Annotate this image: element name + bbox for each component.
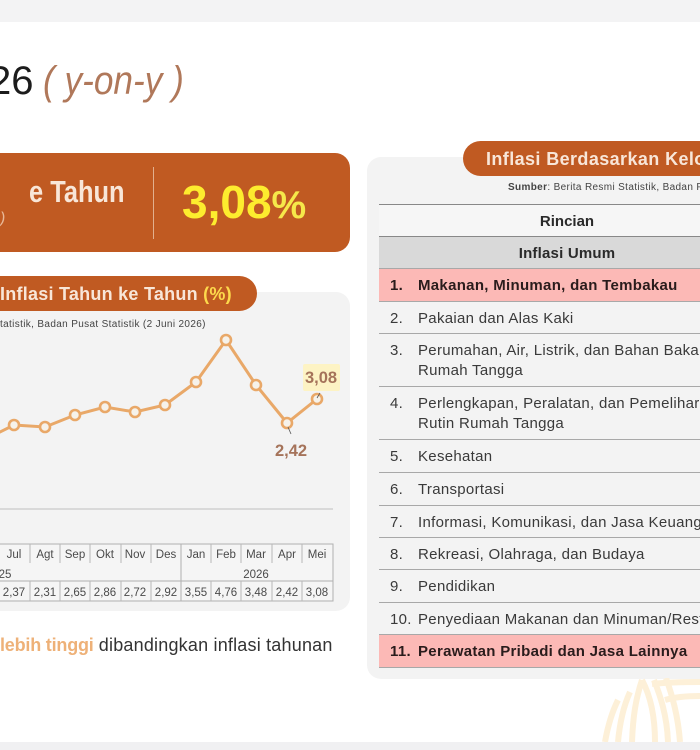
row 1 (379, 269, 700, 302)
data table: 3,08 (306, 587, 328, 599)
line chart: 3,08 (305, 369, 337, 387)
row 11: 11. (390, 643, 411, 660)
data table: Agt (36, 549, 54, 561)
row 7: 7. (390, 514, 403, 531)
row 7 (379, 506, 700, 538)
row 5: 5. (390, 448, 403, 465)
row 5: Kesehatan (418, 448, 492, 465)
row 6: 6. (390, 481, 403, 498)
row 8: 8. (390, 546, 403, 563)
row 2: 2. (390, 310, 403, 327)
headline value: 3,08% (182, 176, 306, 228)
row 10 (379, 603, 700, 635)
headline label: e Tahun (29, 174, 125, 209)
data table: 3,48 (245, 587, 267, 599)
row 9: 9. (390, 578, 403, 595)
row 11 (379, 635, 700, 668)
title qualifier: ( y-on-y ) (43, 59, 184, 103)
data table: Jan (187, 549, 205, 561)
line chart (0, 334, 340, 510)
chart heading pill: Inflasi Tahun ke Tahun (%) (0, 284, 232, 304)
row 4: 4. (390, 395, 403, 412)
column header: Rincian (540, 213, 594, 230)
row 2: Pakaian dan Alas Kaki (418, 310, 574, 327)
decorative logo arcs (602, 678, 700, 742)
bottom band (0, 742, 700, 750)
row 4: Rutin Rumah Tangga (418, 415, 564, 432)
general inflation row (379, 237, 700, 269)
panel: inflation by group (367, 157, 700, 679)
data table: Mei (308, 549, 326, 561)
data table: 2,31 (34, 587, 56, 599)
data table: 4,76 (215, 587, 237, 599)
row 3: Rumah Tangga (418, 362, 523, 379)
headline label remainder: ) (0, 210, 5, 227)
row 3: Perumahan, Air, Listrik, dan Bahan Bakar (418, 342, 700, 359)
data table: 2,65 (64, 587, 86, 599)
panel: headline inflation value (0, 153, 350, 252)
data table (0, 544, 334, 602)
data table: 2,92 (155, 587, 177, 599)
column header (379, 204, 700, 237)
chart heading pill (0, 276, 257, 311)
data table: Des (156, 549, 176, 561)
chart source: tatistik, Badan Pusat Statistik (2 Juni 2026) (0, 319, 206, 330)
data table: Mar (246, 549, 266, 561)
data table: Nov (125, 549, 145, 561)
data table: 2,72 (124, 587, 146, 599)
group heading pill (463, 141, 700, 176)
data table: Apr (278, 549, 296, 561)
data table: Sep (65, 549, 85, 561)
row 3 (379, 334, 700, 387)
row 6 (379, 473, 700, 506)
row 11: Perawatan Pribadi dan Jasa Lainnya (418, 643, 687, 660)
vertical divider (153, 167, 154, 239)
row 6: Transportasi (418, 481, 504, 498)
top band (0, 0, 700, 22)
row 10: 10. (390, 611, 412, 628)
table: inflation groups (379, 204, 700, 668)
row 3: 3. (390, 342, 403, 359)
data table: 3,55 (185, 587, 207, 599)
row 1: 1. (390, 277, 403, 294)
data table: 2,42 (276, 587, 298, 599)
general inflation row: Inflasi Umum (519, 245, 615, 262)
data table: Okt (96, 549, 115, 561)
row 8 (379, 538, 700, 570)
panel: annual inflation chart (0, 292, 350, 611)
data table: 2,86 (94, 587, 116, 599)
data table: 2,37 (3, 587, 25, 599)
row 9: Pendidikan (418, 578, 495, 595)
row 1: Makanan, Minuman, dan Tembakau (418, 277, 678, 294)
line chart: 2,42 (275, 442, 307, 460)
row 9 (379, 570, 700, 603)
data table: 2026 (243, 569, 269, 581)
data table: Feb (216, 549, 236, 561)
row 5 (379, 440, 700, 473)
row 4 (379, 387, 700, 440)
note text: lebih tinggi dibandingkan inflasi tahunan (0, 635, 333, 655)
row 2 (379, 302, 700, 334)
data table: Jul (7, 549, 21, 561)
row 8: Rekreasi, Olahraga, dan Budaya (418, 546, 645, 563)
